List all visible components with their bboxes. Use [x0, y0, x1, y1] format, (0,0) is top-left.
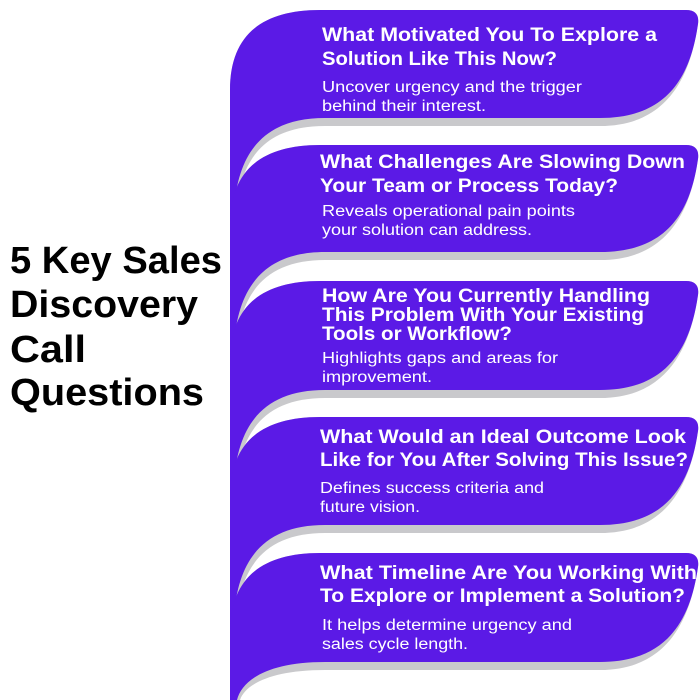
heading 3: Tools or Workflow? [322, 324, 512, 345]
desc 3 [322, 350, 558, 386]
desc 4: Defines success criteria and [320, 480, 544, 497]
heading 5 [320, 563, 697, 607]
title: Questions [10, 372, 204, 414]
heading 2 [320, 152, 685, 197]
desc 2 [322, 203, 575, 239]
heading 1: What Motivated You To Explore a [322, 25, 657, 46]
heading 5: To Explore or Implement a Solution? [320, 586, 685, 607]
heading 4: Like for You After Solving This Issue? [320, 450, 688, 471]
desc 4 [320, 480, 544, 516]
heading 5: What Timeline Are You Working With [320, 563, 697, 584]
band 3 [230, 281, 698, 510]
desc 1: behind their interest. [322, 98, 486, 115]
heading 1 [322, 25, 657, 70]
heading 2: What Challenges Are Slowing Down [320, 152, 685, 173]
desc 5: sales cycle length. [322, 636, 468, 653]
desc 3: Highlights gaps and areas for [322, 350, 558, 367]
band 1 [230, 10, 698, 240]
heading 4: What Would an Ideal Outcome Look [320, 427, 686, 448]
title: 5 Key Sales [10, 240, 222, 282]
desc 5 [322, 617, 572, 653]
desc 1: Uncover urgency and the trigger [322, 79, 582, 96]
heading 4 [320, 427, 688, 471]
heading 2: Your Team or Process Today? [320, 176, 618, 197]
heading 3: How Are You Currently Handling [322, 286, 650, 307]
desc 5: It helps determine urgency and [322, 617, 572, 634]
title [10, 240, 222, 414]
title: Discovery [10, 284, 198, 326]
heading 1: Solution Like This Now? [322, 49, 557, 70]
band 5 [230, 553, 698, 700]
desc 3: improvement. [322, 369, 432, 386]
band 2 [230, 145, 698, 375]
heading 3 [322, 286, 650, 345]
band 4 [230, 417, 698, 645]
shadows [230, 10, 698, 700]
desc 1 [322, 79, 582, 115]
title: Call [10, 329, 86, 371]
heading 3: This Problem With Your Existing [322, 305, 644, 326]
desc 4: future vision. [320, 499, 420, 516]
desc 2: your solution can address. [322, 222, 532, 239]
desc 2: Reveals operational pain points [322, 203, 575, 220]
